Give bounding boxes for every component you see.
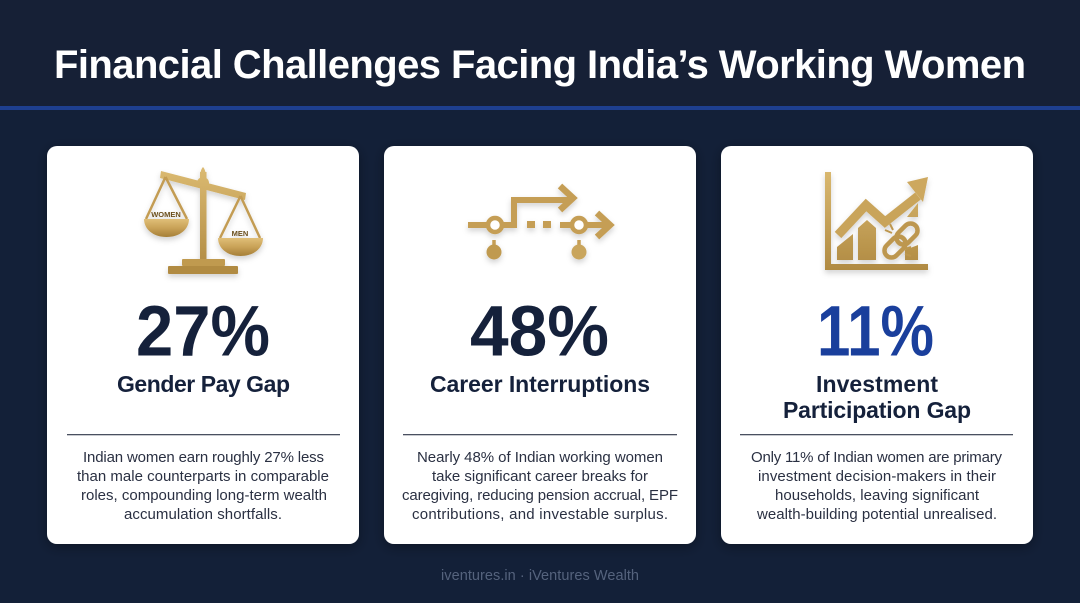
icon: balance scale: WOMEN: [151, 210, 181, 219]
heading: gender pay gap: Gender Pay Gap: [117, 371, 290, 397]
text: career interruptions description: Nearly 48% of Indian working women: [417, 449, 663, 466]
panel: gender pay gap: [47, 146, 359, 544]
text: gender pay gap description: roles, compounding long-term wealth: [81, 487, 327, 504]
text: investment gap description: Only 11% of Indian women are primary: [751, 449, 1002, 466]
title: Financial Challenges Facing India’s Working Women: [54, 43, 1026, 87]
panel: career interruptions: [384, 146, 696, 544]
footer: iventures.in · iVentures Wealth: [441, 568, 639, 584]
heading: career interruptions: Career Interruptions: [430, 371, 650, 397]
text: career interruptions description: take significant career breaks for: [432, 468, 648, 485]
text: investment gap description: [751, 449, 1002, 523]
text: gender pay gap description: accumulation shortfalls.: [124, 506, 282, 523]
heading: investment participation gap: Investment: [816, 371, 938, 397]
text: career interruptions description: caregiving, reducing pension accrual, EPF: [402, 487, 678, 504]
stat: 27%: 27%: [136, 292, 270, 372]
text: gender pay gap description: Indian women earn roughly 27% less: [83, 449, 324, 466]
text: gender pay gap description: than male counterparts in comparable: [77, 468, 329, 485]
stat: 11%: 11%: [817, 292, 934, 372]
heading: investment participation gap: [783, 371, 971, 423]
heading: investment participation gap: Participation Gap: [783, 397, 971, 423]
text: career interruptions description: [402, 449, 678, 523]
icon: balance scale: [144, 167, 263, 274]
header rule: [0, 106, 1080, 110]
stat: 48%: 48%: [470, 292, 609, 372]
text: investment gap description: investment decision-makers in their: [758, 468, 996, 485]
text: investment gap description: households, leaving significant: [775, 487, 980, 504]
icon: balance scale: MEN: [232, 229, 248, 238]
icon: growth chart with broken chain: [825, 172, 928, 270]
text: investment gap description: wealth-building potential unrealised.: [756, 506, 997, 523]
panel: investment participation gap: [721, 146, 1033, 544]
text: gender pay gap description: [77, 449, 329, 523]
icon: career path arrows: [468, 186, 610, 260]
text: career interruptions description: contributions, and investable surplus.: [412, 506, 668, 523]
